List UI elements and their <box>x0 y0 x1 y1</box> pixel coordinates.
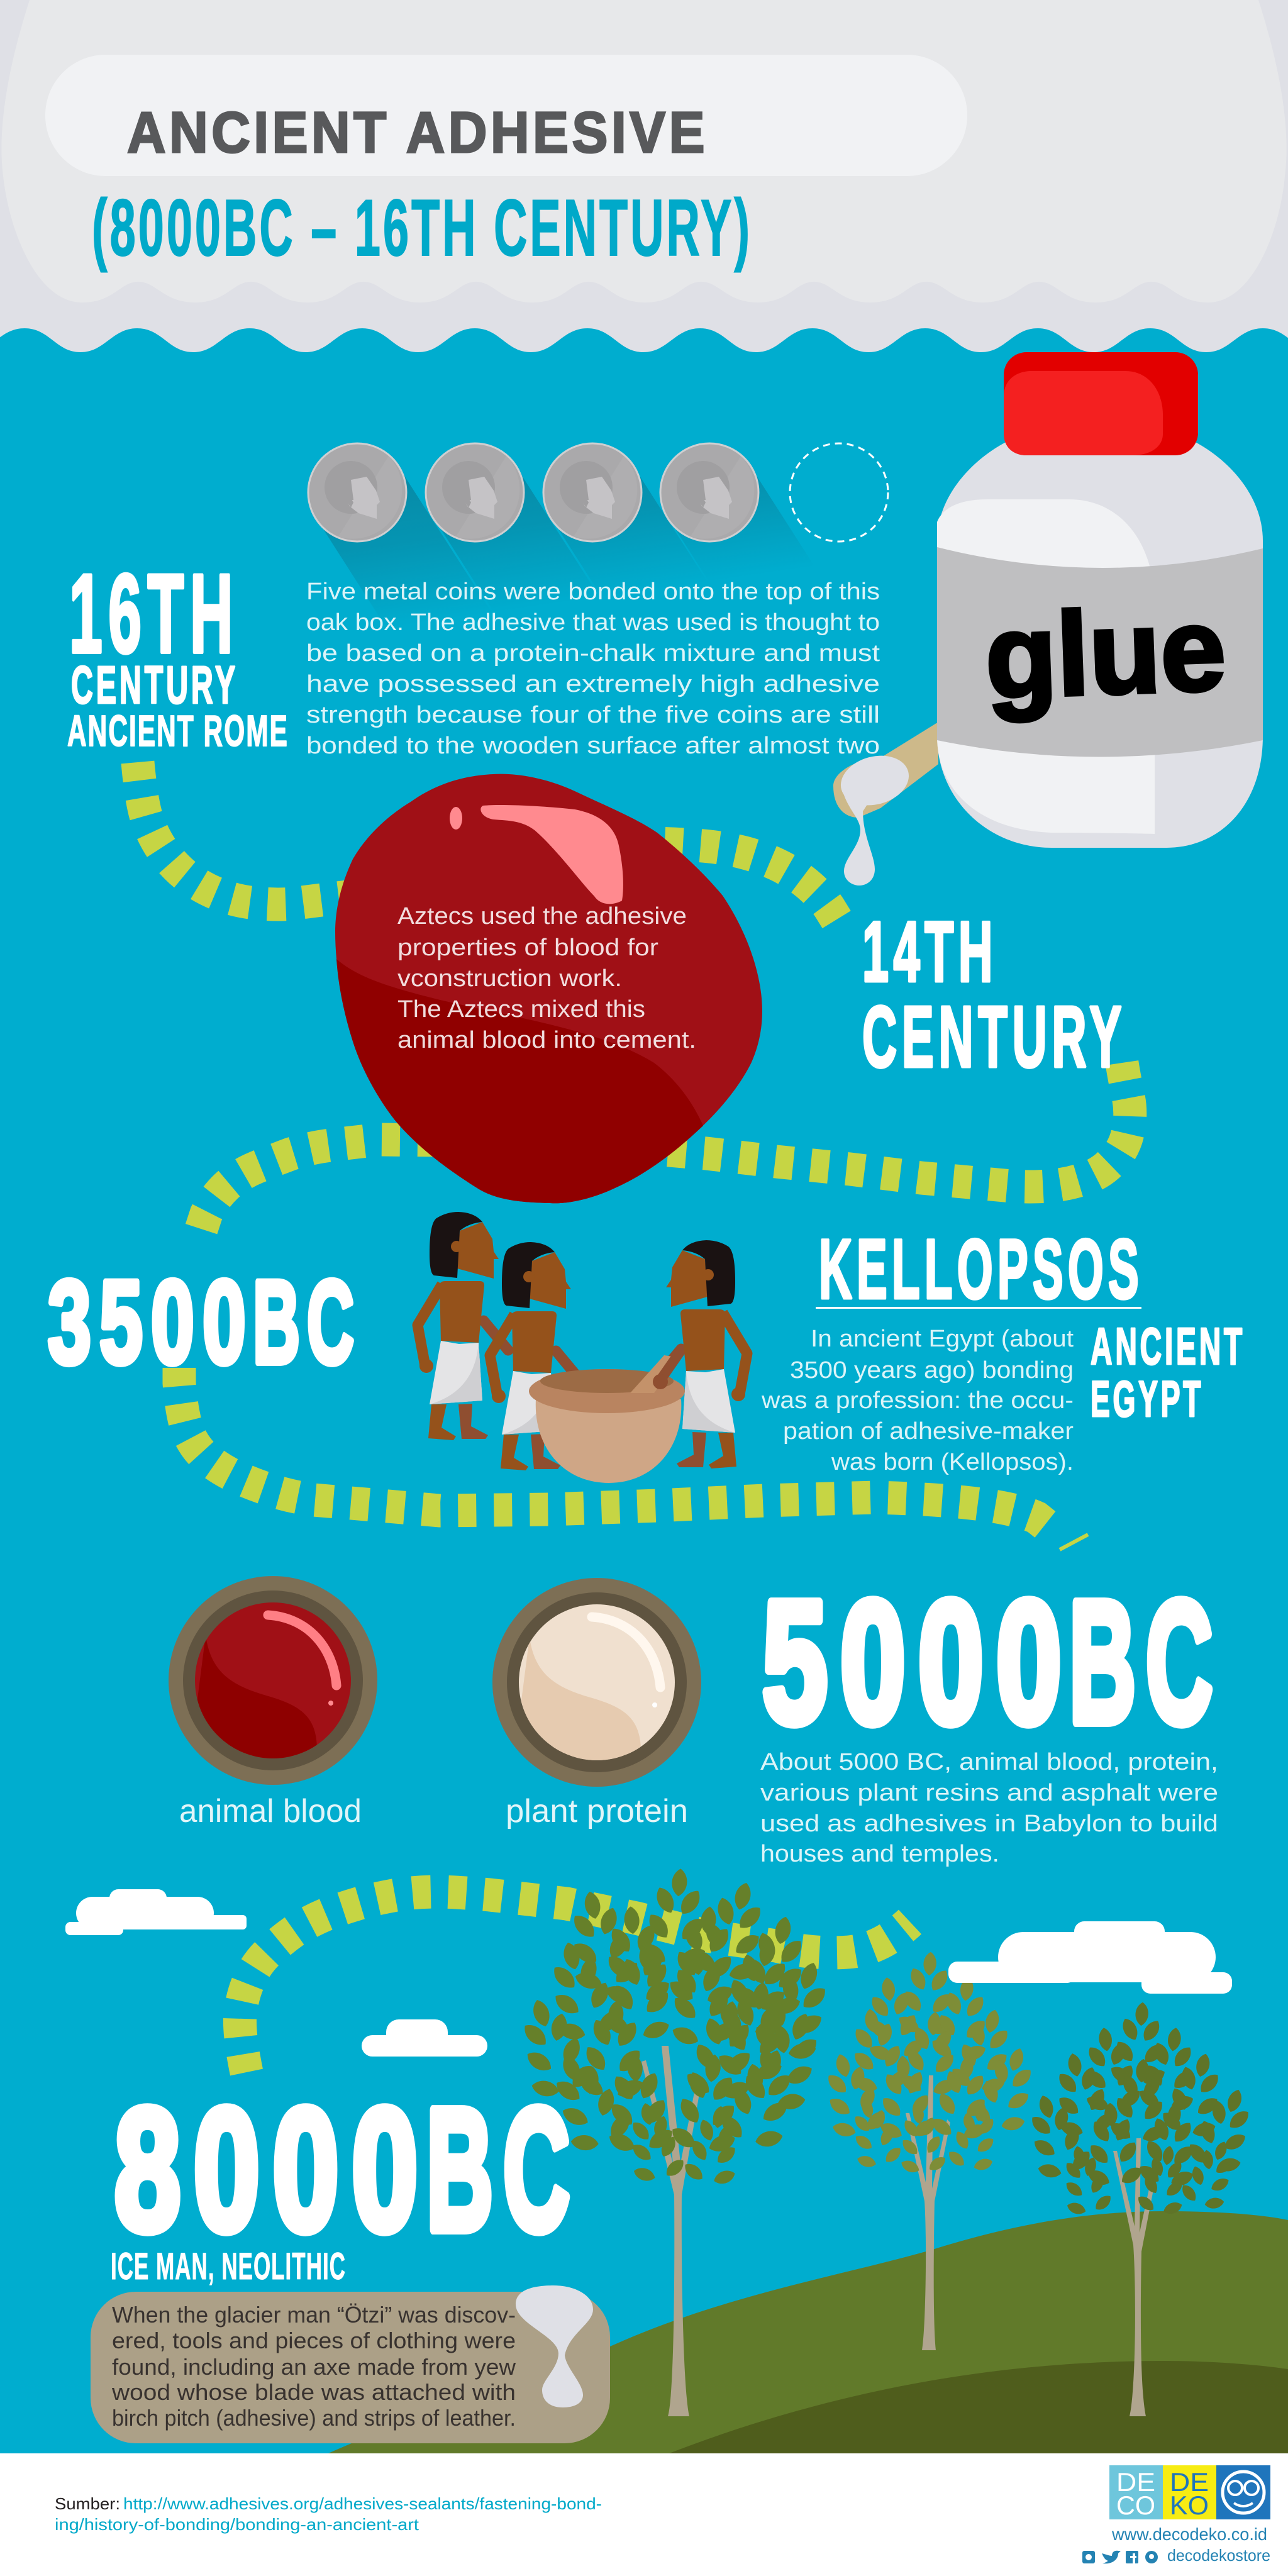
logo: Decodeko: CO <box>1116 2490 1155 2520</box>
title pill <box>45 55 967 176</box>
text: 5000BC description: various plant resins and asphalt were <box>760 1780 1218 1806</box>
source text <box>55 2494 602 2534</box>
trunk <box>641 2046 699 2416</box>
mortar rim <box>529 1369 685 1413</box>
missing coin outline <box>790 443 888 541</box>
panel: blood drop <box>335 774 762 1203</box>
heading: Ancient Egypt: EGYPT <box>1091 1371 1204 1428</box>
tree 1 <box>504 1865 847 2416</box>
text: Ötzi description: birch pitch (adhesive) and strips of leather. <box>112 2405 516 2431</box>
heading: 16th century <box>67 551 289 755</box>
text: Kellopsos description: was a profession: the occu- <box>761 1387 1074 1414</box>
man 1 <box>418 1212 508 1440</box>
dashed path: lower tail <box>1060 1535 1088 1550</box>
cloud right <box>948 1921 1232 1994</box>
tree 3 <box>1014 2000 1267 2416</box>
text: coins description: Five metal coins were bonded onto the top of this <box>306 579 880 605</box>
pestle <box>630 1355 675 1393</box>
dashed path: top right <box>629 843 843 930</box>
gloss <box>480 805 623 904</box>
source text: ing/history-of-bonding/bonding-an-ancient-art <box>55 2515 419 2534</box>
source text: Sumber: <box>55 2494 120 2513</box>
text: Aztecs: The Aztecs mixed this <box>397 996 645 1023</box>
subtitle: (8000BC – 16TH CENTURY) <box>92 183 752 272</box>
panel: Ötzi <box>91 2285 610 2443</box>
mortar bowl <box>536 1399 681 1483</box>
heading: 3500BC: 3500 <box>48 1256 254 1388</box>
social icons <box>1082 2551 1158 2563</box>
coin 4 <box>660 443 758 541</box>
coins <box>308 443 888 541</box>
title: ANCIENT ADHESIVE <box>127 101 708 165</box>
dark hill <box>669 2361 1288 2453</box>
heading: 16th century: ANCIENT ROME <box>67 706 289 755</box>
label: animal blood: animal blood <box>179 1793 362 1829</box>
text: 5000BC description: used as adhesives in Babylon to build <box>760 1811 1218 1837</box>
text: Kellopsos description: In ancient Egypt (about <box>811 1326 1074 1352</box>
leaves <box>811 1950 1048 2177</box>
icon: glue drip <box>516 2285 593 2407</box>
text: coins description: be based on a protein-chalk mixture and must <box>306 640 880 667</box>
bottle cap highlight <box>1004 371 1163 455</box>
tree 2 <box>811 1950 1048 2350</box>
source text: http://www.adhesives.org/adhesives-sealants/fastening-bond- <box>123 2494 602 2513</box>
trunk <box>1113 2138 1159 2416</box>
text: Aztecs: properties of blood for <box>397 935 658 961</box>
dashed path: lower <box>179 1368 1052 1530</box>
mortar inside <box>540 1369 674 1393</box>
light hill <box>328 2211 1288 2453</box>
footer background <box>0 2453 1288 2576</box>
heading: Kellopsos <box>816 1223 1143 1316</box>
header light scalloped shape <box>1 0 1287 303</box>
text: Aztecs: vconstruction work. <box>397 965 622 992</box>
leaves <box>1014 2000 1267 2220</box>
text: 5000BC description: houses and temples. <box>760 1841 999 1867</box>
logo: Decodeko: DE <box>1170 2467 1209 2497</box>
coin 1 <box>308 443 406 541</box>
text: Ötzi description: ered, tools and pieces of clothing were <box>112 2328 516 2353</box>
coin shadows <box>324 475 860 638</box>
text: Ötzi description: wood whose blade was attached with <box>111 2379 516 2405</box>
icon: animal blood bowl <box>169 1576 377 1785</box>
text: Ötzi description <box>111 2302 516 2431</box>
grey header background <box>0 0 1288 377</box>
hills <box>328 2211 1288 2453</box>
illustration: Egyptians with mortar <box>418 1212 747 1483</box>
man 2 <box>490 1242 580 1470</box>
man 3 <box>657 1240 747 1468</box>
heading: Ice Man, Neolithic: ICE MAN, NEOLITHIC <box>111 2245 346 2287</box>
text: Kellopsos description: was born (Kellopsos). <box>831 1449 1074 1475</box>
bottle highlight <box>937 499 1155 834</box>
text: Ötzi description: When the glacier man “Ötzi” was discov- <box>112 2302 516 2328</box>
text: Ötzi description: found, including an axe made from yew <box>112 2354 516 2380</box>
icon: plant protein bowl <box>492 1578 701 1787</box>
heading: 14th century <box>862 904 1126 1085</box>
text: coins description: have possessed an extremely high adhesive <box>306 671 880 697</box>
text: Aztecs <box>397 903 696 1053</box>
text: Kellopsos description <box>761 1326 1074 1475</box>
heading: 16th century: 16TH <box>69 551 239 676</box>
logo: Decodeko <box>1109 2465 1270 2520</box>
text: Aztecs: animal blood into cement. <box>397 1027 696 1053</box>
dashed path: middle <box>198 1063 1130 1239</box>
heading: 3500BC: BC <box>253 1256 361 1388</box>
bottle cap <box>1004 352 1198 455</box>
text: coins description <box>306 579 880 759</box>
bottle label text: glue <box>983 582 1228 723</box>
dark lower shade <box>336 959 703 1203</box>
text: Kellopsos description: pation of adhesive-maker <box>783 1418 1074 1445</box>
text: 5000BC description: About 5000 BC, animal blood, protein, <box>760 1749 1218 1775</box>
heading: 16th century: CENTURY <box>71 655 238 714</box>
icon: glue bottle <box>937 352 1263 848</box>
heading: 8000BC: 8000 <box>114 2073 431 2267</box>
dashed path: top left <box>138 762 352 904</box>
text: 5000BC description <box>760 1749 1218 1867</box>
logo: Decodeko: KO <box>1170 2490 1209 2520</box>
text: coins description: oak box. The adhesive that was used is thought to <box>306 609 880 636</box>
website: www.decodeko.co.id <box>1111 2524 1267 2544</box>
heading: 14th century: 14TH <box>862 904 997 999</box>
social handle: decodekostore <box>1167 2546 1270 2565</box>
heading: Ancient Egypt <box>1091 1317 1245 1428</box>
heading: 5000BC: 5000 <box>762 1565 1074 1759</box>
logo: Decodeko: DE <box>1116 2467 1155 2497</box>
blob <box>335 774 762 1203</box>
coin 3 <box>543 443 641 541</box>
gloss dot <box>450 807 462 830</box>
trunk <box>906 2075 950 2350</box>
coin 2 <box>426 443 524 541</box>
text: Kellopsos description: 3500 years ago) bonding <box>790 1357 1074 1384</box>
label: plant protein: plant protein <box>506 1793 688 1829</box>
text: coins description: bonded to the wooden surface after almost two <box>306 733 880 759</box>
text: coins description: strength because four of the five coins are still <box>306 702 880 728</box>
bottle body <box>937 440 1263 848</box>
leaves <box>504 1865 847 2190</box>
cloud left <box>65 1889 247 1935</box>
text: Aztecs: Aztecs used the adhesive <box>397 903 687 930</box>
heading: 8000BC: BC <box>426 2073 580 2267</box>
cloud middle <box>362 2019 487 2057</box>
man 3 arm <box>653 1350 681 1389</box>
icon: spoon with glue <box>833 722 938 886</box>
dashed path: trees <box>240 1892 910 2072</box>
bottle label <box>937 547 1263 757</box>
